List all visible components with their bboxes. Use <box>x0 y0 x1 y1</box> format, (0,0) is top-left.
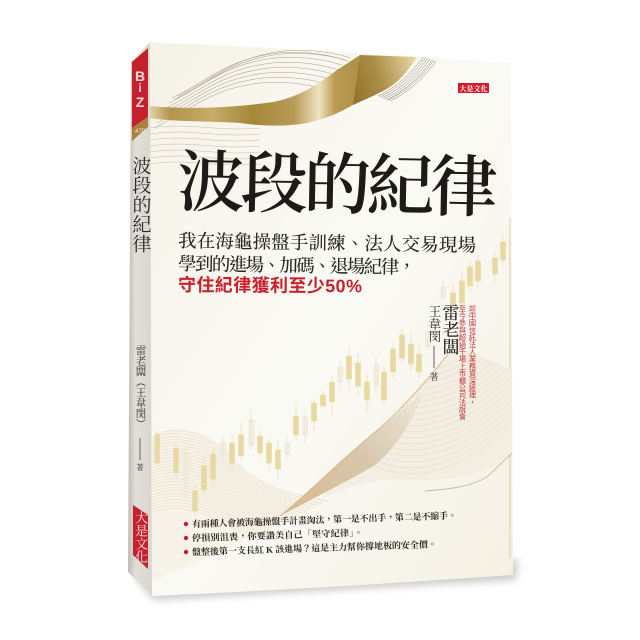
author block: 王韋閔 <box>427 305 441 343</box>
publisher logo: 大是文化 <box>460 84 488 93</box>
subtitle: 學到的進場、加碼、退場紀律， <box>178 254 416 279</box>
subtitle: 我在海龜操盤手訓練、法人交易現場 <box>178 231 476 257</box>
author block <box>427 304 459 382</box>
spine Biz logo panel: Z <box>136 94 145 110</box>
spine author: 雷老闆（王韋閔） <box>134 345 146 429</box>
spine publisher panel: 大是文化 <box>133 510 148 564</box>
main title: 波段的紀律 <box>177 146 498 226</box>
author credentials: 至今參與超過千場上市櫃公司法說會 <box>458 305 468 421</box>
spine title: 波段的紀律 <box>130 156 151 254</box>
author block: 雷老闆 <box>440 304 459 355</box>
spine Biz logo panel <box>132 48 148 128</box>
spine series number <box>132 117 148 141</box>
bullet one: 有兩種人會被海龜操盤手計畫淘汰，第一是不出手，第二是不縮手。 <box>192 510 457 529</box>
top wave lines <box>150 50 436 165</box>
rising beige fan <box>280 345 512 516</box>
left wave lines <box>152 430 328 582</box>
bullet two: 停損別沮喪，你要讚美自己「堅守紀律」。 <box>192 527 363 543</box>
bullet list <box>184 510 457 558</box>
author credentials: 前中國信託法人業務資深經理， <box>468 304 478 406</box>
book spine <box>128 42 153 596</box>
front cover <box>150 42 515 596</box>
spine series number: 470 <box>135 129 146 135</box>
author credentials <box>458 304 478 421</box>
spine Biz logo panel: i <box>138 81 142 95</box>
subtitle: 守住紀律獲利至少50% <box>178 274 362 296</box>
gold ribbon <box>150 55 417 126</box>
right wave area <box>322 346 512 499</box>
candlestick chart <box>155 234 506 516</box>
subtitle <box>178 231 476 296</box>
spine author rule and mark: 著 <box>136 462 144 472</box>
spine author rule and mark <box>136 438 144 472</box>
spine Biz logo panel: B <box>135 68 145 84</box>
bullet three: 盤整後第一支長紅 K 該進場？這是主力幫你撐地板的安全價。 <box>192 538 437 557</box>
author block: 著 <box>429 371 439 382</box>
book shadow <box>135 560 518 600</box>
